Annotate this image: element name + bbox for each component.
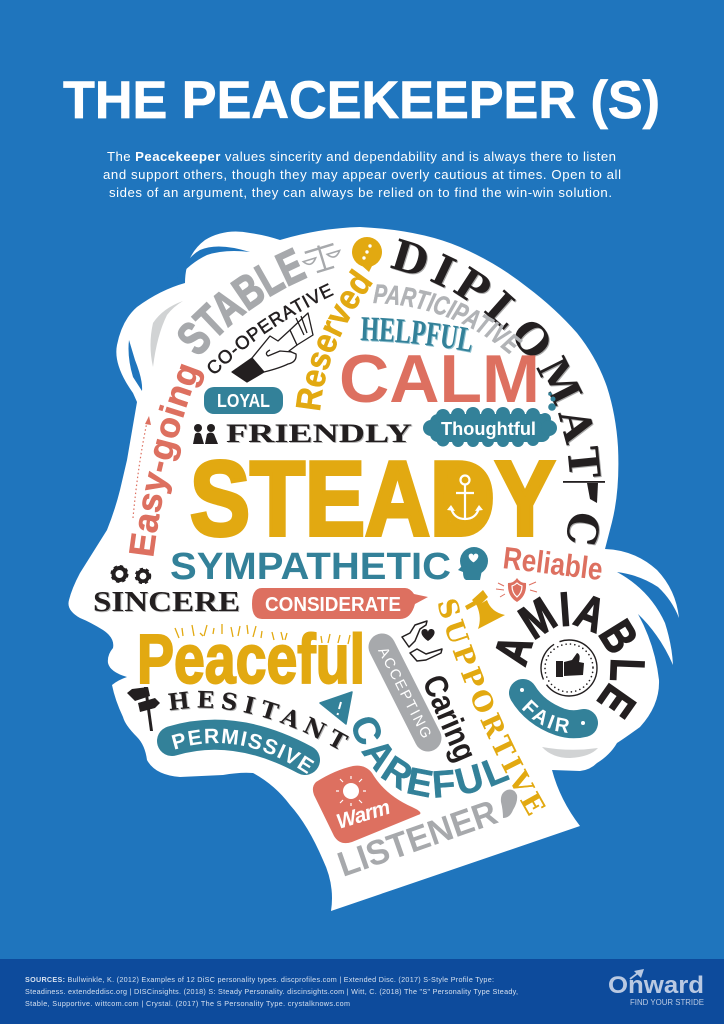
word: STEADY: STEADY: [190, 440, 555, 558]
icon: head with heart: [458, 547, 488, 580]
sources text: Stable, Supportive. wittcom.com | Crystal. (2017) The S Personality Type. crystalknows.com: [25, 999, 350, 1008]
word: STABLE: STABLE: [178, 247, 308, 354]
intro text block: [103, 149, 621, 200]
bubbles: [548, 392, 556, 411]
word badge: Warm: [313, 766, 420, 843]
icon: speech bubble: [352, 237, 382, 272]
logo: Onward: FIND YOUR STRIDE: [630, 998, 704, 1007]
icon: thumbs up badge: [541, 640, 597, 696]
word: HESITANT: HESITANT: [168, 690, 350, 750]
sources text: [25, 975, 518, 1008]
word badge: CONSIDERATE: CONSIDERATE: [265, 594, 401, 616]
word: SUPPORTIVE: SUPPORTIVE: [438, 599, 546, 816]
word: Reliable: Reliable: [501, 540, 605, 587]
logo: Onward: Onward: [608, 972, 704, 999]
icon: ear: [501, 790, 517, 818]
word badge: Thoughtful: Thoughtful: [441, 419, 536, 439]
icon: gears: [112, 567, 150, 582]
word: PARTICIPATIVE: PARTICIPATIVE: [373, 284, 523, 354]
word: AMIABLE: AMIABLE: [496, 592, 645, 720]
footer bar: [0, 959, 724, 1024]
word badge: LOYAL: LOYAL: [217, 391, 270, 411]
word: LISTENER: LISTENER: [333, 793, 502, 885]
icon: shield: [496, 578, 537, 602]
head shape: [68, 227, 679, 911]
icon: bell: [465, 590, 505, 629]
intro text block: and support others, though they may appear overly cautious at times. Open to all: [103, 167, 621, 182]
panel: head silhouette with word cloud: [68, 227, 679, 911]
rays above Peaceful: [175, 624, 350, 644]
word: Easy-going: Easy-going: [129, 364, 204, 556]
word: CAREFUL: CAREFUL: [353, 717, 510, 798]
word: SINCERE: SINCERE: [93, 587, 240, 618]
word badge: PERMISSIVE: PERMISSIVE: [172, 728, 314, 774]
word badge: LOYAL: [204, 387, 283, 414]
word: Peaceful: Peaceful: [137, 620, 365, 698]
word badge: Warm: Warm: [334, 796, 393, 834]
intro text block: sides of an argument, they can always be relied on to find the win-win solution.: [109, 185, 612, 200]
sources text: Steadiness. extendeddisc.org | DISCinsights. (2018) S: Steady Personality. discinsights.com | Witt, C. (2018) The "S" Personality Type Steady,: [25, 987, 518, 996]
icon: scales: [300, 240, 344, 275]
icon: caring hands: [402, 621, 442, 661]
word: Caring: Caring: [416, 669, 485, 767]
word badge: FAIR: FAIR: [522, 699, 569, 733]
word: HELPFUL: HELPFUL: [360, 317, 472, 353]
word badge: Thoughtful: [423, 407, 557, 447]
icon: warning triangle: [320, 692, 352, 724]
word badge: CONSIDERATE: [252, 588, 428, 619]
logo: Onward: [608, 969, 704, 1007]
icon: signpost: [127, 687, 160, 731]
arrow: dotted: [133, 416, 151, 518]
icon: people: [193, 424, 218, 444]
icon: anchor: [443, 465, 487, 529]
word: DIPLOMATIC: DIPLOMAT IC: [390, 238, 602, 546]
icon: handshake: [232, 313, 313, 382]
hair strand cut-outs: [128, 246, 598, 758]
title: THE PEACEKEEPER (S): [63, 71, 660, 130]
sources text: SOURCES: Bullwinkle, K. (2012) Examples of 12 DiSC personality types. discprofiles.com | Extended Disc. (2017) S-Style Profile Type:: [25, 975, 494, 984]
word: CALM: CALM: [339, 341, 540, 417]
word: FRIENDLY: FRIENDLY: [226, 419, 412, 448]
word badge: FAIR: [509, 679, 598, 738]
word: CO-OPERATIVE: CO-OPERATIVE: [208, 283, 334, 374]
word: Reserved: Reserved: [296, 268, 373, 410]
word badge: ACCEPTING: ACCEPTING: [374, 645, 434, 741]
icon: flag in DIPLOMATIC: [563, 481, 605, 503]
intro text block: The Peacekeeper values sincerity and dependability and is always there to listen: [107, 149, 616, 164]
word: SYMPATHETIC: SYMPATHETIC: [170, 546, 451, 588]
